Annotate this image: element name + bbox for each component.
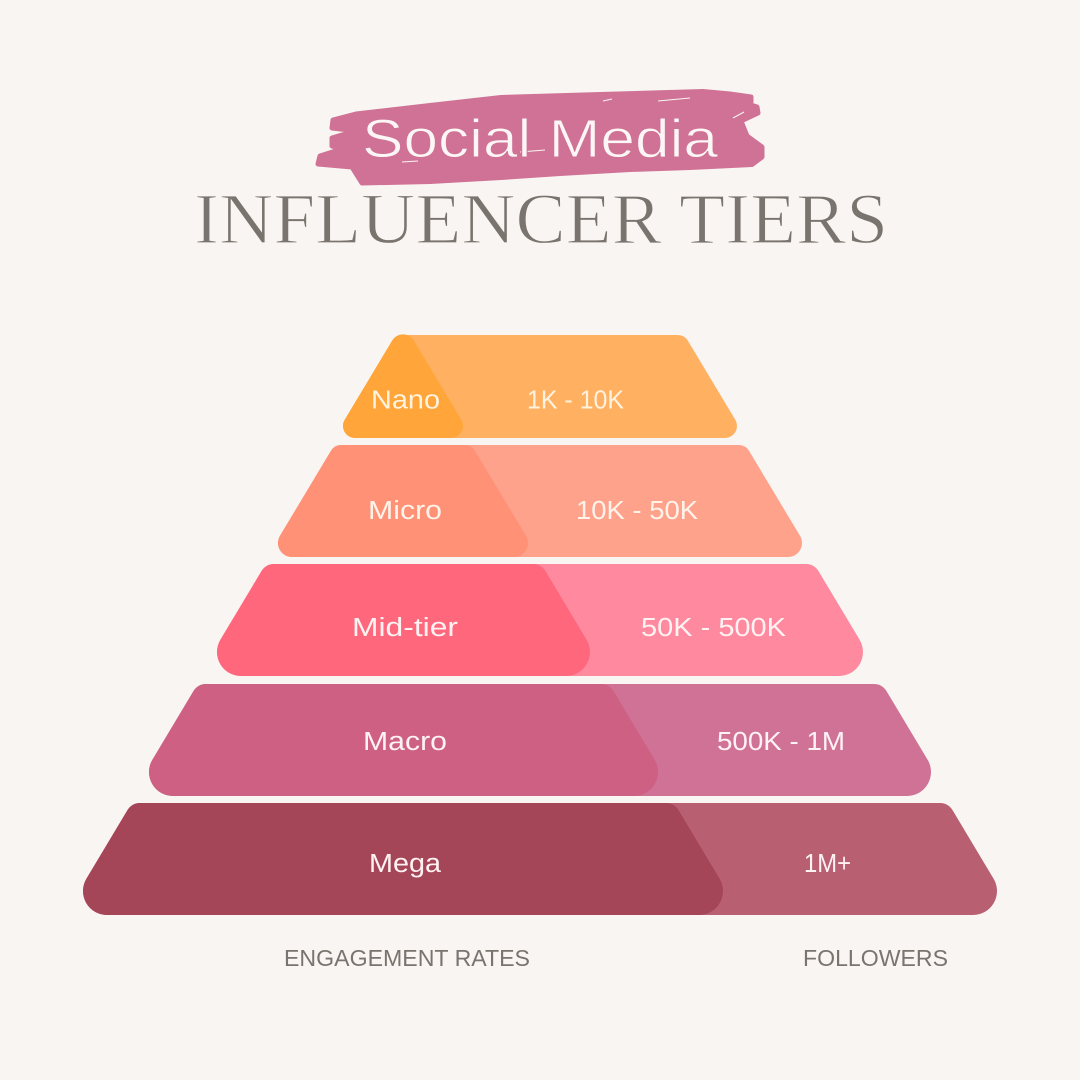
column label: followers: FOLLOWERS (803, 945, 948, 971)
tier: Mega: Mega (369, 850, 442, 878)
tier: Micro: Micro (368, 497, 442, 525)
pyramid chart (83, 334, 997, 915)
tier: Mega (83, 803, 997, 915)
title block (194, 92, 888, 259)
tier: Macro (149, 684, 931, 796)
main title: Influencer Tiers: INFLUENCER TIERS (194, 179, 888, 259)
tier: Macro: 500K - 1M (717, 728, 845, 756)
subtitle: Social Media: Social Media (362, 109, 719, 169)
tier: Mid-tier: Mid-tier (352, 614, 459, 642)
tier: Mid-tier: 50K - 500K (641, 614, 786, 642)
tier: Nano (343, 334, 737, 438)
tier: Macro: Macro (363, 728, 447, 756)
tier: Nano: 1K - 10K (527, 386, 624, 414)
tier: Micro: 10K - 50K (576, 497, 698, 525)
tier: Micro (278, 445, 802, 557)
tier: Nano: Nano (371, 386, 440, 414)
column label: engagement rates: ENGAGEMENT RATES (284, 945, 530, 971)
brush stroke behind subtitle (318, 92, 762, 183)
tier: Mid-tier (217, 564, 863, 676)
tier: Mega: 1M+ (804, 850, 851, 878)
